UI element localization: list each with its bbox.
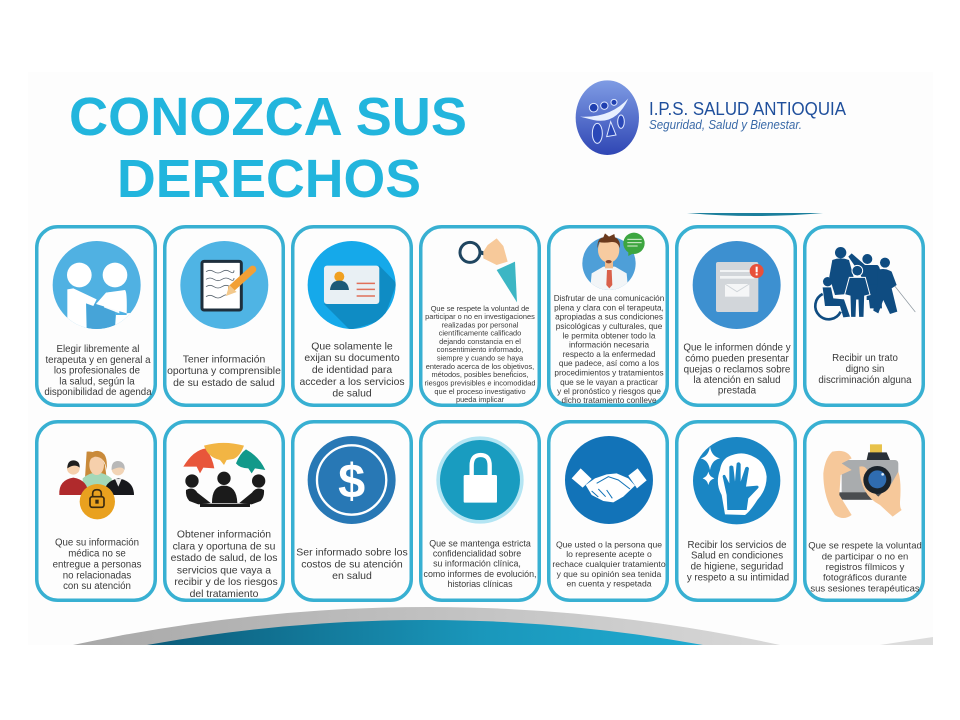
text: de identidad para	[312, 365, 392, 376]
text	[425, 304, 535, 404]
text: quejas o reclamos sobre	[684, 364, 791, 376]
text	[808, 540, 922, 595]
text: la salud, según la	[59, 376, 135, 388]
text: y que su opinión sea tenida	[557, 569, 662, 579]
text: terapeuta y en general a	[45, 355, 151, 366]
bottom swoosh	[73, 607, 933, 645]
text: confidencialidad sobre	[433, 548, 521, 558]
icon: handshake	[565, 436, 653, 524]
text: servicios que vaya a	[177, 566, 271, 576]
text: Que le informen dónde y	[683, 342, 791, 354]
text: acceder a los servicios	[299, 377, 405, 388]
text	[683, 342, 791, 396]
text: realizadas por personal	[442, 320, 519, 330]
icon: doctor with speech bubble	[582, 233, 645, 292]
text: Ser informado sobre los	[296, 547, 408, 559]
logo emblem	[576, 80, 639, 155]
text: de su estado de salud	[173, 378, 275, 389]
slide background panel	[28, 72, 933, 645]
text	[818, 353, 912, 386]
text: psicológicas y culturales, que	[556, 322, 663, 331]
card: información clara	[165, 422, 283, 600]
text	[296, 547, 408, 582]
text: Que se respete la voluntad	[808, 540, 922, 551]
text	[171, 530, 278, 600]
title	[69, 87, 467, 209]
logo name: I.P.S. SALUD ANTIOQUIA	[649, 98, 847, 119]
card: registros fílmicos	[805, 422, 923, 600]
text: Que solamente le	[311, 342, 393, 352]
text: no relacionadas	[63, 570, 131, 582]
text	[552, 540, 666, 588]
text: Recibir los servicios de	[687, 540, 787, 551]
card: documento de identidad	[293, 227, 411, 405]
title: CONOZCA SUS	[69, 87, 467, 147]
text: discriminación alguna	[818, 375, 912, 386]
text: consentimiento informado,	[437, 345, 523, 354]
text: registros fílmicos y	[826, 562, 905, 573]
card: quejas o reclamos	[677, 227, 795, 405]
text	[554, 294, 665, 405]
title: DERECHOS	[117, 149, 421, 209]
logo tagline: Seguridad, Salud y Bienestar.	[649, 118, 802, 132]
logo: IPS Salud Antioquia	[576, 80, 847, 155]
text: que el proceso investigativo	[434, 387, 526, 396]
icon: two people shaking hands	[53, 241, 141, 330]
text: rechace cualquier tratamiento	[552, 559, 666, 569]
icon: dollar coin: $	[338, 454, 365, 508]
text: y el pronóstico y riesgos que	[557, 387, 661, 396]
text: exijan su documento	[304, 353, 400, 364]
text: de participar o no en	[822, 551, 908, 562]
text: entregue a personas	[53, 560, 142, 570]
text: Que su información	[55, 538, 139, 548]
text: historias clínicas	[447, 579, 513, 589]
card: confidencialidad	[421, 422, 539, 600]
text: apropiadas a sus condiciones	[555, 312, 663, 322]
text: Que se respete la voluntad de	[431, 304, 529, 313]
text: costos de su atención	[301, 558, 403, 570]
text: Elegir libremente al	[57, 344, 139, 355]
icon: document and pencil	[180, 241, 268, 329]
icon: hand holding magnifier	[460, 238, 517, 302]
text: y respeto a su intimidad	[687, 572, 789, 583]
text: la atención en salud	[693, 375, 781, 386]
text: del tratamiento	[190, 589, 259, 600]
text: plena y clara con el terapeuta,	[554, 304, 664, 312]
text: oportuna y comprensible	[167, 366, 281, 377]
decorative teal sliver	[687, 213, 823, 216]
icon: meeting with speech bubbles	[183, 443, 265, 507]
card: aceptar o rechazar tratamiento	[549, 422, 667, 600]
text: Tener información	[183, 354, 266, 366]
text: sus sesiones terapéuticas	[810, 584, 920, 595]
text: como informes de evolución,	[424, 569, 536, 579]
text: Obtener información	[177, 530, 271, 540]
text	[687, 540, 789, 583]
text: métodos, posibles beneficios,	[432, 370, 528, 379]
text: con su atención	[63, 581, 131, 592]
text: los profesionales de	[54, 366, 140, 376]
text: de higiene, seguridad	[691, 562, 783, 573]
text: en cuenta y respetada	[566, 578, 652, 588]
text: dejando constancia en el	[439, 337, 521, 346]
text: respecto a la enfermedad	[563, 350, 656, 359]
text	[167, 354, 281, 389]
text	[53, 538, 142, 592]
card: elegir terapeuta	[37, 227, 155, 405]
text: pueda implicar	[456, 395, 505, 404]
text: de salud	[332, 388, 372, 400]
text: disponibilidad de agenda	[44, 387, 152, 398]
icon: ID card	[308, 241, 397, 330]
text: en salud	[332, 570, 372, 582]
text: médica no se	[68, 548, 126, 560]
text: cómo pueden presentar	[685, 354, 789, 364]
text: recibir y de los riesgos	[174, 577, 278, 588]
text	[299, 342, 405, 400]
card: higiene	[677, 422, 795, 600]
text: información necesaria	[569, 340, 649, 350]
icon: cleaning hand with sparkles	[693, 437, 780, 524]
icon: three people with padlock	[59, 451, 134, 519]
text: científicamente calificado	[439, 328, 521, 338]
text: enterado acerca de los objetivos,	[426, 362, 534, 371]
text: Salud en condiciones	[691, 551, 783, 562]
text: lo represente acepte o	[566, 549, 652, 559]
text: le permita obtener todo la	[563, 332, 656, 340]
text: riesgos previsibles e incomodidad	[425, 378, 535, 388]
card: información médica	[37, 422, 155, 600]
card: tener información	[165, 227, 283, 405]
text: estado de salud, de los	[171, 553, 277, 564]
card: comunicación con terapeuta	[549, 227, 667, 405]
text: que padece, así como a los	[559, 359, 659, 368]
icon: padlock	[436, 436, 524, 524]
icon: diverse people and wheelchair	[815, 247, 915, 319]
text: Recibir un trato	[832, 353, 898, 364]
text: Que se mantenga estricta	[429, 538, 531, 548]
text: procedimientos y tratamientos	[554, 368, 664, 378]
text	[424, 538, 536, 589]
card: trato digno	[805, 227, 923, 405]
card: costos	[293, 422, 411, 600]
text: su información clínica,	[433, 558, 521, 568]
text: fotográficos durante	[823, 573, 907, 584]
text: que se le vayan a practicar	[560, 378, 658, 387]
text: dicho tratamiento conlleve	[561, 396, 657, 405]
text: digno sin	[846, 364, 884, 375]
text: clara y oportuna de su	[173, 542, 276, 552]
text: Disfrutar de una comunicación	[554, 294, 665, 303]
text: siempre y cuando se haya	[437, 354, 524, 362]
icon: mailbox with alert	[693, 241, 781, 329]
icon: dollar coin	[308, 436, 396, 524]
text	[44, 344, 152, 398]
card: voluntad investigaciones	[421, 227, 539, 405]
text: Que usted o la persona que	[556, 540, 662, 550]
text: participar o no en investigaciones	[425, 312, 535, 321]
icon: hands holding camera	[823, 444, 902, 518]
text: prestada	[718, 386, 757, 396]
